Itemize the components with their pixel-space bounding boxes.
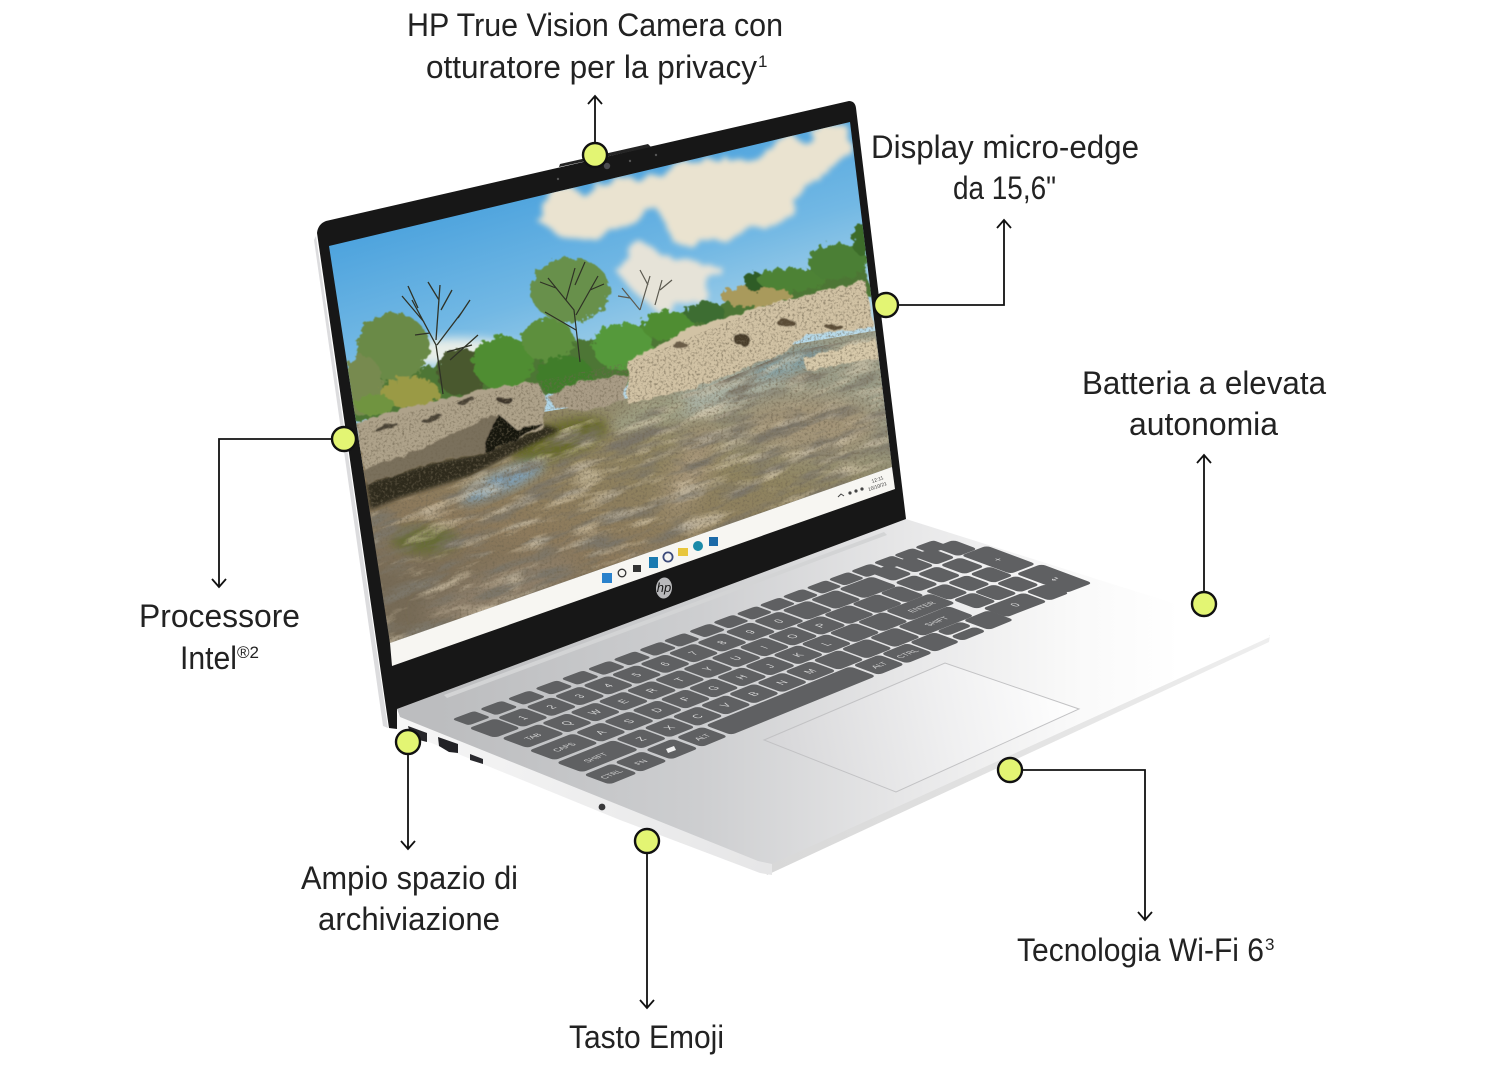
rock: far right ledge [804, 339, 878, 371]
label: battery: Batteria a elevata [1082, 365, 1326, 401]
taskbar bar [390, 467, 895, 666]
keyboard row: ASDF: ENTER [906, 601, 939, 613]
base left side with ports [397, 714, 772, 875]
marker: Wi-Fi [998, 758, 1022, 782]
label: battery: autonomia [1129, 406, 1278, 442]
label: processor [139, 598, 300, 676]
keyboard row: ZXCV: Z [634, 736, 650, 742]
keyboard row: ASDF: G [705, 685, 723, 692]
leader arrow: processor [212, 439, 344, 587]
leader arrow: battery [1197, 455, 1211, 604]
lid silver back edge [314, 236, 388, 728]
keyboard row: ZXCV: V [718, 702, 735, 709]
label: camera: HP True Vision Camera con [407, 7, 783, 43]
touchpad [764, 663, 1079, 792]
keyboard row: numbers: 8 [715, 640, 731, 646]
keyboard row: ASDF: H [734, 674, 751, 681]
label: emoji key: Tasto Emoji [569, 1019, 724, 1055]
system tray and clock: 12:11 [871, 475, 885, 485]
marker: emoji key [635, 829, 659, 853]
keyboard row: ZXCV: C [690, 713, 708, 720]
numeric keypad [868, 536, 1094, 621]
trees [342, 224, 872, 425]
keyboard row: ZXCV [556, 606, 974, 772]
keyboard row: function keys [452, 540, 950, 725]
laptop base [397, 519, 1270, 875]
keyboard row: space bar [584, 610, 1014, 785]
bare tree branches [402, 262, 672, 394]
marker: storage [396, 730, 420, 754]
water reflections [391, 342, 880, 634]
keyboard row: space bar: ALT [692, 733, 713, 742]
keyboard row: ASDF: J [763, 664, 778, 669]
infographic: laptop with feature callouts [142, 12, 1326, 1054]
keyboard row: ASDF [529, 593, 956, 760]
keyboard row: QWERTY: U [728, 655, 746, 662]
webcam privacy shutter bump [559, 144, 651, 167]
cloud: large [528, 124, 851, 243]
callout: emoji key [569, 829, 724, 1055]
label: storage: archiviazione [318, 901, 500, 937]
lid bezel [317, 101, 906, 729]
label: Wi-Fi: 3 [1265, 935, 1274, 954]
label: camera: otturatore per la privacy [426, 49, 757, 85]
keyboard row: ZXCV: B [746, 691, 763, 697]
label: battery [1082, 365, 1326, 442]
photo grain [356, 281, 892, 641]
riverbed mottling [370, 336, 890, 643]
keyboard row: numbers [469, 576, 898, 738]
rock: left [356, 382, 546, 484]
leader arrow: display [886, 220, 1011, 305]
keyboard row: ASDF: F [678, 696, 694, 703]
dark bank under left rock [366, 425, 560, 510]
laptop lid [314, 101, 906, 729]
keyboard row: ZXCV: M [802, 668, 820, 675]
microphones [557, 154, 657, 180]
water and riverbed [340, 330, 900, 650]
hinge highlight [444, 532, 887, 698]
leader arrow: storage [401, 742, 415, 849]
keyboard row: ZXCV: SHIFT [581, 752, 611, 763]
icon: hp logo: hp [657, 580, 671, 595]
keyboard row: space bar: CTRL [894, 648, 922, 659]
marker: battery [1192, 592, 1216, 616]
leader arrow: emoji key [640, 841, 654, 1008]
sky [320, 110, 910, 470]
numeric keypad: 0 [1008, 602, 1024, 608]
callout: display [871, 129, 1139, 317]
port: HDMI [438, 737, 458, 753]
port: audio jack [599, 804, 605, 810]
port: USB-A [408, 726, 427, 742]
leader arrow: camera [588, 96, 602, 155]
cloud: small [612, 249, 721, 316]
label: storage [301, 860, 518, 937]
keyboard row: ZXCV: X [662, 725, 679, 731]
label: display: Display micro-edge [871, 129, 1139, 165]
keyboard row: QWERTY: I [759, 645, 772, 650]
port: USB-C [470, 754, 483, 764]
system tray and clock [838, 475, 888, 497]
keyboard row: QWERTY: TAB [522, 733, 544, 741]
label: camera: 1 [758, 52, 767, 71]
callout: battery [1082, 365, 1326, 616]
icon: Windows key [666, 746, 676, 753]
leader arrow: Wi-Fi [1010, 770, 1152, 920]
label: Wi-Fi: Tecnologia Wi-Fi 6 [1017, 932, 1264, 968]
keyboard [452, 536, 1094, 785]
tree band [352, 267, 872, 425]
keyboard row: numbers: 0 [772, 618, 788, 624]
marker: processor [332, 427, 356, 451]
keyboard row: QWERTY: Q [559, 720, 577, 727]
keyboard row: ASDF: K [791, 652, 808, 659]
palm rest deck [397, 519, 1270, 864]
keyboard row: numbers: 2 [544, 704, 560, 710]
label: processor: ®2 [237, 643, 259, 662]
marker: camera [583, 143, 607, 167]
system tray and clock: 10/10/21 [867, 481, 888, 493]
base front-right edge [760, 635, 1270, 875]
keyboard row: numbers: 4 [601, 683, 617, 689]
taskbar icons [602, 537, 718, 583]
keyboard row: ASDF: S [621, 718, 638, 725]
keyboard row: numbers: 3 [573, 694, 589, 699]
callout: storage [301, 730, 518, 937]
numeric keypad: + [991, 557, 1007, 563]
keyboard row: QWERTY: O [784, 633, 802, 640]
keyboard row: ASDF: D [649, 707, 667, 714]
keyboard row: numbers: 5 [630, 672, 646, 678]
label: camera [407, 7, 783, 85]
label: processor: Processore [139, 598, 300, 634]
label: display: da 15,6" [953, 170, 1056, 206]
haze near horizon [385, 338, 525, 366]
keyboard row: space bar: CTRL [598, 769, 626, 780]
keyboard row: space bar: FN [632, 759, 650, 766]
icon: hp logo [655, 577, 673, 599]
keyboard row: numbers: 9 [743, 629, 759, 635]
marker: display [874, 293, 898, 317]
screen wallpaper photo [329, 122, 892, 643]
keyboard row: ZXCV: SHIFT [922, 616, 952, 627]
numeric keypad: ↵ [1047, 576, 1066, 583]
callout: camera [407, 7, 783, 167]
keyboard row: ASDF: A [593, 729, 610, 736]
keyboard row: QWERTY: E [616, 699, 633, 705]
callout: processor [139, 427, 356, 676]
keyboard row: QWERTY: Y [700, 666, 717, 672]
label: processor: Intel [180, 640, 237, 676]
keyboard row: numbers: 1 [516, 715, 532, 721]
taskbar [390, 467, 895, 666]
label: display [871, 129, 1139, 206]
keyboard row: QWERTY: P [813, 623, 830, 629]
keyboard row: numbers: 7 [686, 651, 703, 657]
keyboard row: QWERTY: W [586, 709, 606, 716]
keyboard row: ASDF: CAPS [550, 742, 579, 753]
keyboard row: numbers: 6 [658, 661, 674, 667]
icon: webcam lens [604, 163, 610, 169]
label: storage: Ampio spazio di [301, 860, 518, 896]
keyboard row: ASDF: L [819, 641, 835, 647]
keyboard row: QWERTY: T [672, 677, 689, 683]
keyboard row: QWERTY: R [644, 688, 661, 694]
keyboard row: QWERTY [501, 586, 925, 748]
keyboard row: space bar: ALT [869, 661, 890, 669]
rock: middle [547, 375, 628, 411]
callout: Wi-Fi [998, 758, 1274, 968]
rock: right [628, 281, 874, 404]
keyboard row: ZXCV: N [774, 680, 792, 686]
